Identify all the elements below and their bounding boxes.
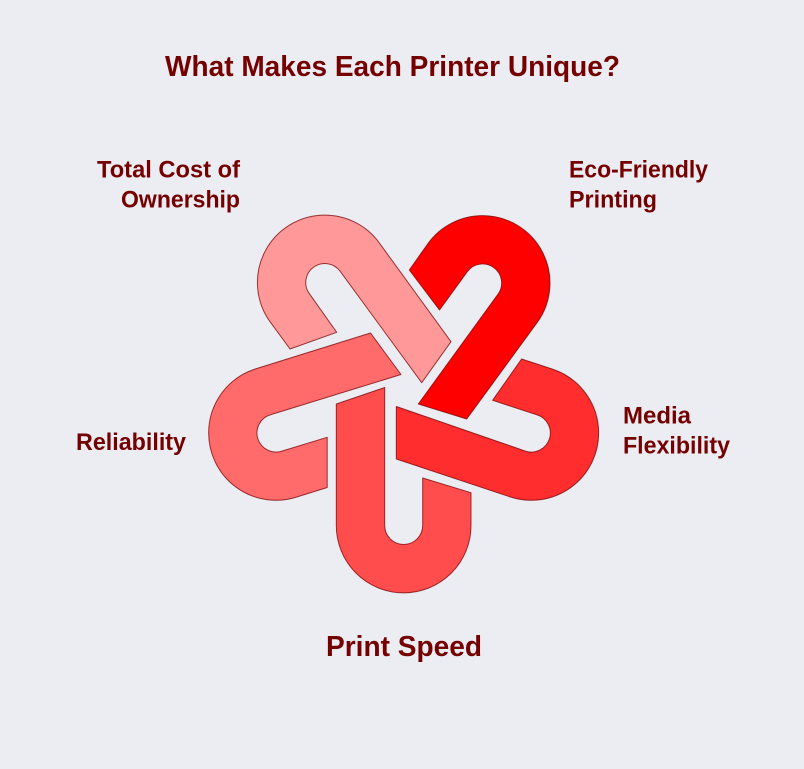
label: Media Flexibility: Flexibility: [623, 432, 731, 460]
title: What Makes Each Printer Unique?: [165, 51, 620, 83]
label: Reliability: Reliability: [76, 429, 187, 456]
label: Media Flexibility: Media: [623, 402, 692, 430]
label: Eco-Friendly Printing: [569, 156, 709, 214]
link: Print Speed: [336, 388, 471, 593]
link: Total Cost of Ownership: [257, 215, 451, 383]
label: Total Cost of Ownership: [97, 156, 241, 214]
diagram: interlocking five-link chain: [209, 215, 599, 593]
link: Eco-Friendly Printing: [409, 216, 550, 419]
link: Media Flexibility: [396, 359, 599, 500]
label: Print Speed: Print Speed: [326, 631, 482, 663]
label: Eco-Friendly Printing: Eco-Friendly: [569, 156, 709, 184]
link: Reliability: [209, 333, 401, 500]
label: Media Flexibility: [623, 402, 731, 460]
label: Total Cost of Ownership: Total Cost of: [97, 156, 241, 184]
label: Eco-Friendly Printing: Printing: [569, 186, 657, 214]
label: Total Cost of Ownership: Ownership: [121, 186, 240, 214]
